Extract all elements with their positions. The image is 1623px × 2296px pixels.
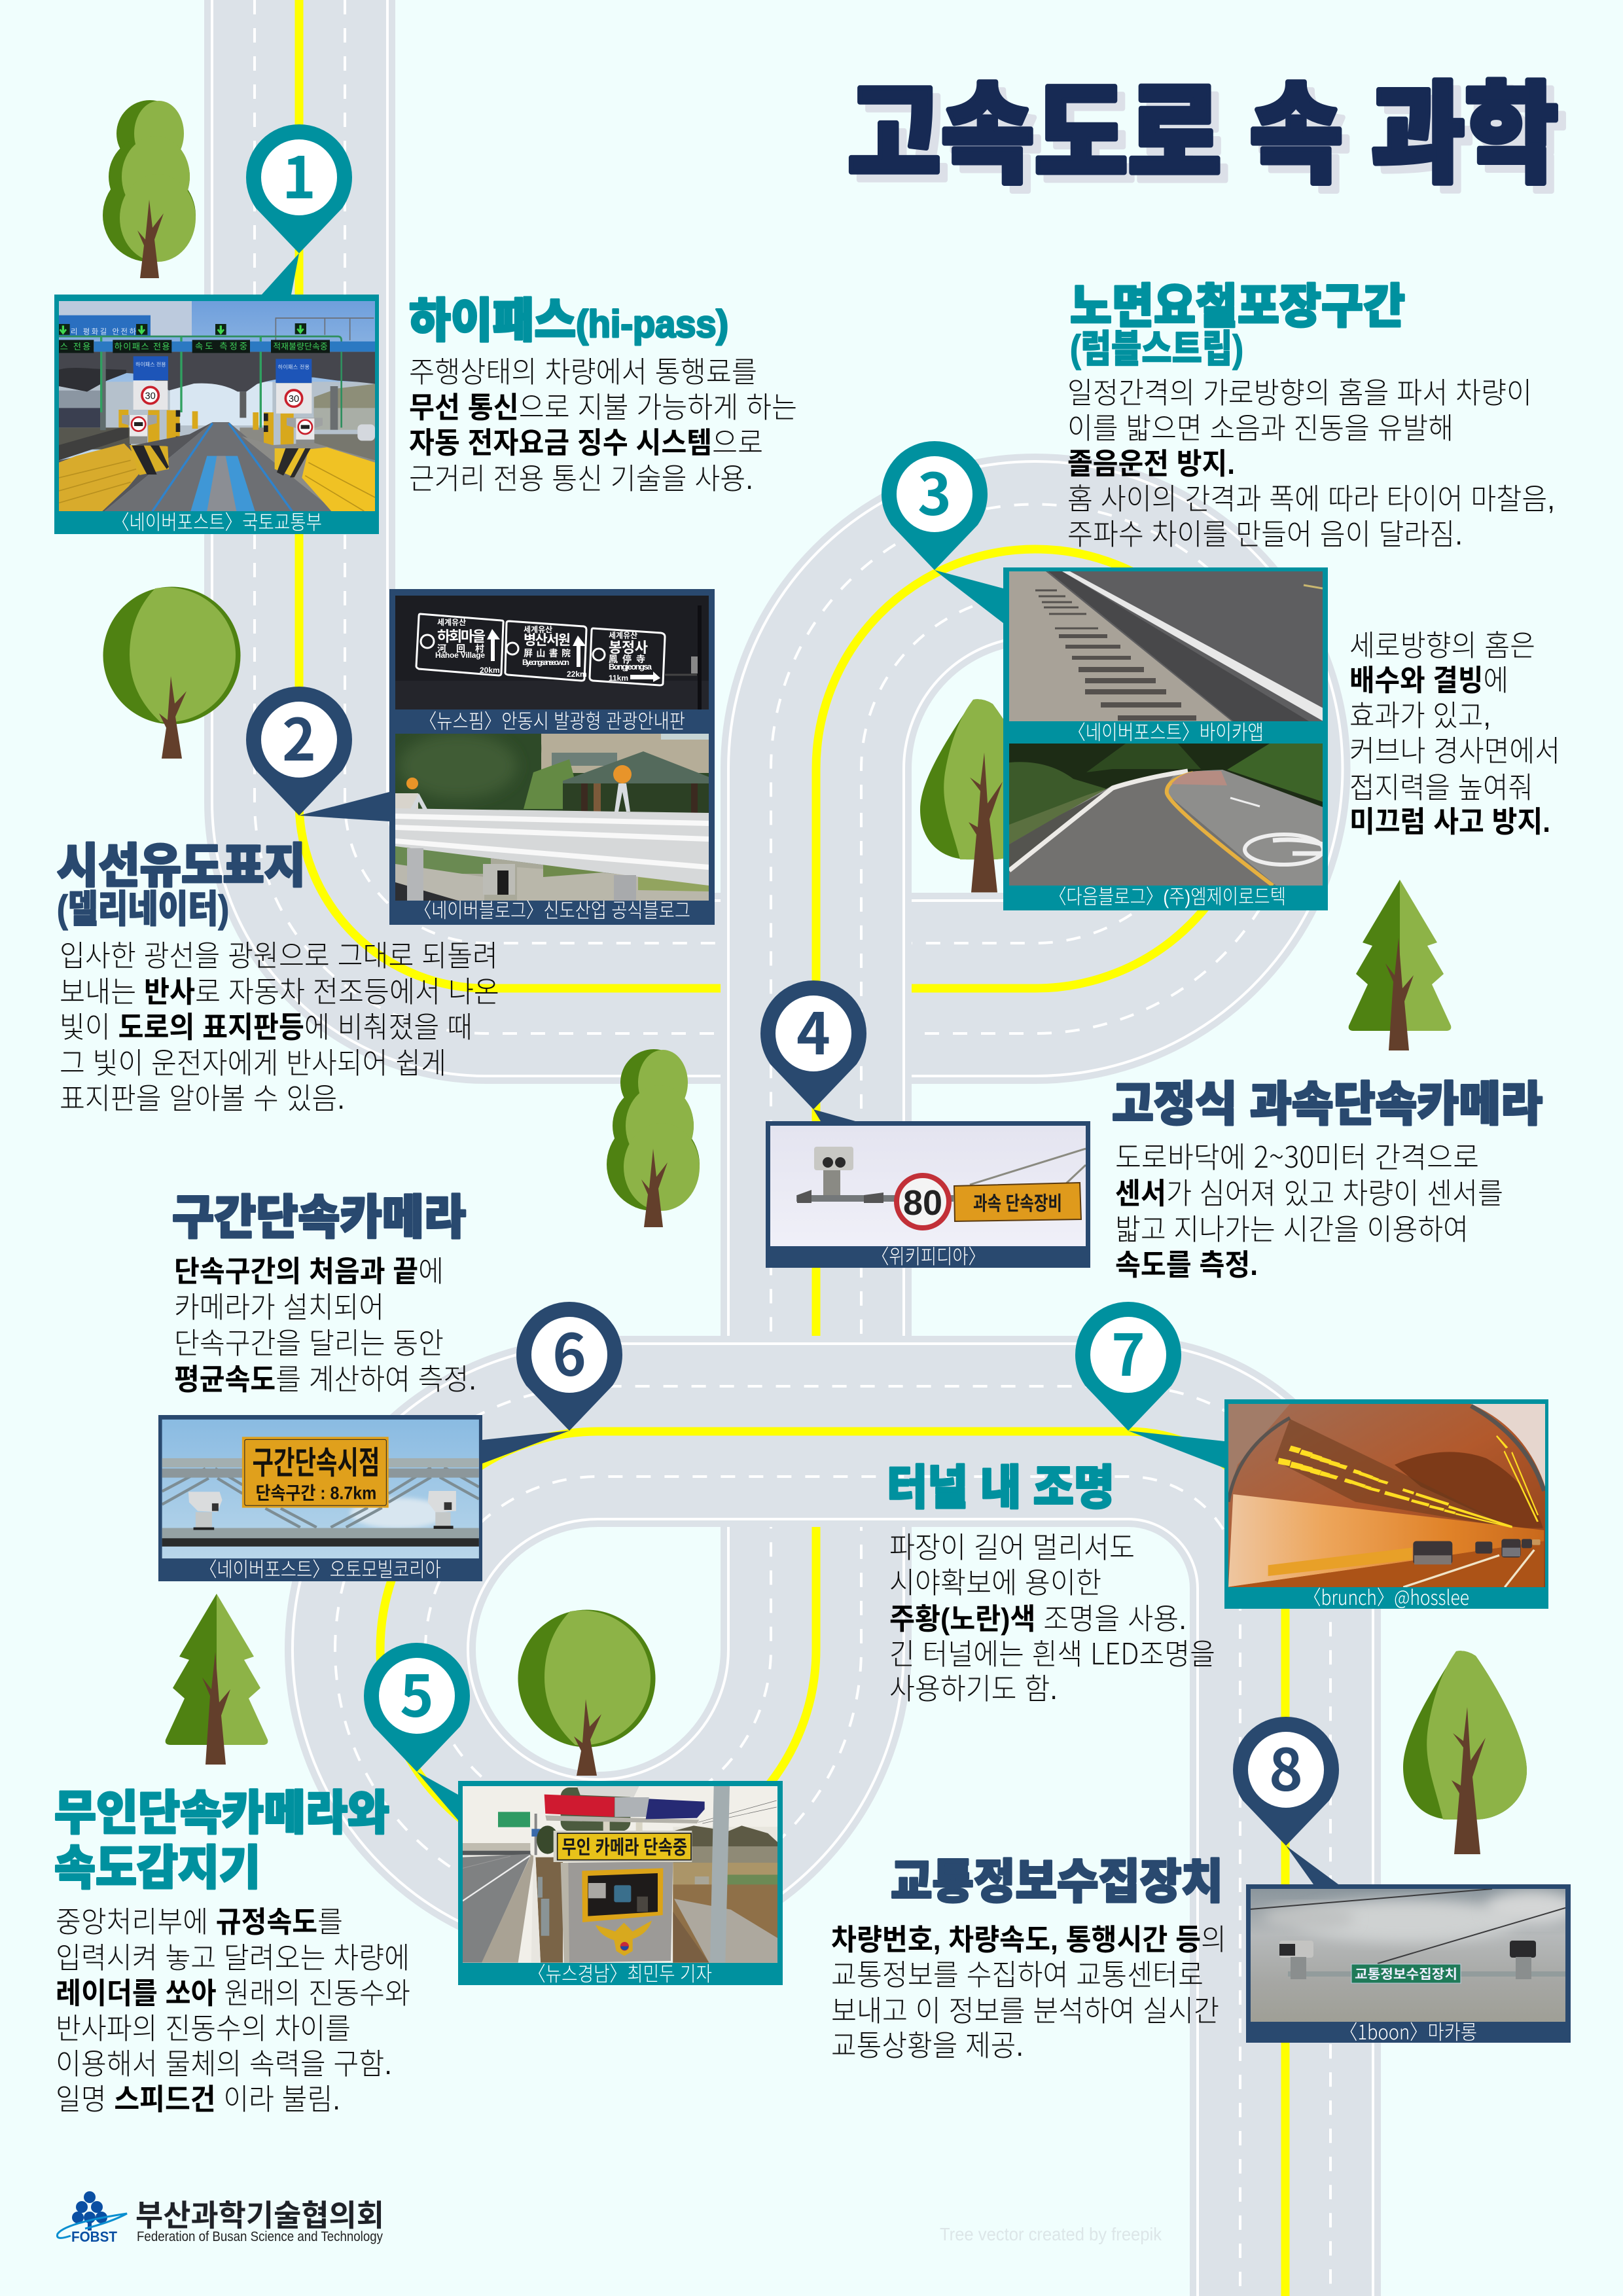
- body text: rumble strip: 일정간격의 가로방향의 홈을 파서 차량이: [1067, 376, 1532, 410]
- photo card 5: unmanned camera: [458, 1781, 783, 1986]
- road segment: upper loop, central vertical road and lower loop: [335, 504, 1300, 1912]
- panel 2: delineator text: [57, 840, 499, 1115]
- pin 2: [246, 687, 352, 816]
- panel 6: section camera text: [172, 1192, 476, 1396]
- pin 1: 1: [282, 132, 316, 215]
- pin 7: 7: [1111, 1310, 1145, 1393]
- body text: longitudinal grooves: [1349, 629, 1560, 838]
- body text: tunnel lighting: 긴 터널에는 흰색 LED조명을: [889, 1630, 1215, 1673]
- body text: speed camera: 일명 스피드건 이라 불림.: [56, 2083, 340, 2116]
- body text: fixed camera: [1115, 1134, 1503, 1282]
- panel 4: fixed camera text: [1112, 1079, 1543, 1282]
- photo card 1: hi-pass toll gate: [54, 295, 379, 534]
- panel 5: speed camera text: [54, 1787, 410, 2116]
- title: 고속도로 속 과학: [847, 73, 1558, 196]
- body text: delineator: 표지판을 알아볼 수 있음.: [60, 1082, 345, 1115]
- photo: toll gate: 적재불량단속중: [273, 342, 328, 351]
- pin 5: [364, 1643, 470, 1772]
- pin 1: [246, 124, 352, 253]
- photo: reflective road signs at night: 11km: [609, 673, 628, 683]
- body text: speed camera: 중앙처리부에 규정속도를: [56, 1905, 343, 1939]
- pin 5: 5: [400, 1651, 434, 1734]
- tree: stacked, top left: [103, 100, 196, 278]
- body text: traffic information collector: 교통상황을 제공.: [831, 2029, 1024, 2062]
- photo: reflective road signs at night: 22km: [567, 670, 587, 679]
- logo mark: [57, 2191, 127, 2245]
- photo: toll gate: 30: [289, 394, 299, 404]
- caption: 〈1boon〉마카롱: [1340, 2016, 1477, 2045]
- pin 8: 8: [1269, 1725, 1303, 1808]
- body text: rumble strip: [1067, 376, 1555, 551]
- photo: speed camera and 80 sign: [770, 1126, 1086, 1246]
- photo: speed camera and 80 sign: 80: [903, 1183, 942, 1223]
- pin 7: [1075, 1302, 1181, 1431]
- photo: camera box at road side: 무인 카메라 단속중: [562, 1837, 687, 1859]
- body text: traffic information collector: 교통정보를 수집하여 교통센터로: [831, 1958, 1204, 1992]
- body text: section camera: 단속구간의 처음과 끝에: [174, 1255, 444, 1288]
- photo card 7: tunnel: [1224, 1399, 1548, 1611]
- panel 7: tunnel text: [887, 1462, 1215, 1706]
- body text: hi-pass: 무선 통신으로 지불 가능하게 하는: [409, 391, 797, 424]
- body text: longitudinal grooves: 커브나 경사면에서: [1349, 734, 1560, 768]
- body text: section camera: 카메라가 설치되어: [174, 1291, 384, 1324]
- body text: speed camera: 이용해서 물체의 속력을 구함.: [56, 2047, 392, 2081]
- body text: tunnel lighting: 시야확보에 용이한: [889, 1566, 1101, 1600]
- photo: traffic information gantry: 교통정보수집장치: [1355, 1967, 1457, 1982]
- photo: section camera gantry: 구간단속시점: [252, 1445, 380, 1480]
- tree: pine, right: [1349, 880, 1451, 1050]
- body text: speed camera: 입력시켜 놓고 달려오는 차량에: [56, 1941, 410, 1975]
- pin 6: 6: [552, 1310, 586, 1393]
- pin 3: 3: [918, 449, 952, 532]
- heading: section camera: 구간단속카메라: [172, 1192, 466, 1244]
- photo: toll gate: 스 전용: [60, 342, 90, 351]
- body text: speed camera: 레이더를 쏘아 원래의 진동수와: [56, 1977, 410, 2010]
- body text: hi-pass: [409, 355, 797, 495]
- pin 4: [760, 980, 866, 1109]
- photo: delineators on guardrail: [395, 734, 709, 901]
- caption: 〈네이버블로그〉신도산업 공식블로그: [414, 899, 690, 922]
- body text: traffic information collector: 보내고 이 정보를 분석하여 실시간: [831, 1994, 1219, 2028]
- body text: rumble strip: 주파수 차이를 만들어 음이 달라짐.: [1067, 518, 1463, 551]
- credit: Tree vector created by freepik: [940, 2224, 1162, 2244]
- tree: teardrop, lower right: [1403, 1651, 1527, 1854]
- photo: toll gate: 하이패스 전용: [135, 361, 166, 367]
- photo: toll gate: 30: [145, 391, 156, 401]
- photo: reflective road signs at night: Hahoe Village: [435, 651, 485, 660]
- photo: toll gate: 속도 측정중: [195, 341, 247, 351]
- body text: section camera: [174, 1255, 476, 1396]
- photo: reflective road signs at night: 20km: [480, 666, 500, 675]
- heading: speed camera: [54, 1787, 389, 1895]
- road segment: lower horizontal road turning down to the bottom: [335, 1386, 1330, 2296]
- photo: toll gate: 리 평화길 안전하: [71, 327, 137, 336]
- body text: fixed camera: 도로바닥에 2~30미터 간격으로: [1115, 1134, 1479, 1176]
- photo card 3: rumble strip: [1003, 567, 1328, 910]
- logo English name: Federation of Busan Science and Technology: [137, 2229, 383, 2244]
- pin 3: [882, 441, 988, 570]
- tree: round, inside lower loop: [518, 1610, 656, 1776]
- body text: hi-pass: 주행상태의 차량에서 통행료를: [409, 355, 757, 389]
- body text: hi-pass: 근거리 전용 통신 기술을 사용.: [409, 462, 753, 495]
- photo card 2: delineator: [389, 589, 715, 925]
- body text: fixed camera: 속도를 측정.: [1115, 1248, 1258, 1282]
- heading: delineator: [57, 840, 306, 931]
- road network: [255, 0, 1330, 2296]
- pin 2: 2: [282, 694, 316, 778]
- pin 4: 4: [796, 988, 830, 1071]
- photo: reflective road signs at night: 병산서원: [524, 633, 571, 648]
- logo: Federation of Busan Science and Technology: [57, 2191, 384, 2245]
- body text: longitudinal grooves: 세로방향의 홈은: [1349, 629, 1535, 662]
- photo: reflective road signs at night: 세계유산: [524, 625, 552, 634]
- heading: rumble strip: [1070, 281, 1405, 370]
- body text: speed camera: 반사파의 진동수의 차이를: [56, 2012, 351, 2045]
- photo: reflective road signs at night: 봉 정 사: [609, 639, 648, 656]
- photo: rumble strip close up: [1009, 571, 1323, 721]
- body text: delineator: 입사한 광선을 광원으로 그대로 되돌려: [60, 939, 498, 973]
- body text: delineator: 그 빛이 운전자에게 반사되어 쉽게: [60, 1047, 446, 1080]
- body text: traffic information collector: [831, 1923, 1226, 2062]
- caption: 〈뉴스경남〉최민두 기자: [528, 1963, 712, 1986]
- heading: delineator: 시선유도표지: [57, 840, 306, 893]
- logo mark: FOBST: [71, 2229, 118, 2245]
- body text: tunnel lighting: 사용하기도 함.: [889, 1672, 1058, 1706]
- caption: 〈네이버포스트〉바이카앱: [1068, 721, 1264, 744]
- body text: longitudinal grooves: 효과가 있고,: [1349, 699, 1491, 732]
- photo card 6: section camera: [158, 1415, 482, 1581]
- body text: fixed camera: 밟고 지나가는 시간을 이용하여: [1115, 1213, 1469, 1246]
- tree: stacked, centre: [607, 1049, 700, 1227]
- body text: traffic information collector: 차량번호, 차량속도, 통행시간 등의: [831, 1923, 1226, 1956]
- tree: round, left: [103, 586, 241, 759]
- caption: 〈네이버포스트〉오토모빌코리아: [200, 1558, 441, 1581]
- body text: longitudinal grooves: 배수와 결빙에: [1349, 664, 1508, 697]
- body text: rumble strip: 졸음운전 방지.: [1067, 447, 1235, 480]
- heading: fixed camera: 고정식 과속단속카메라: [1112, 1079, 1543, 1131]
- photo: tunnel lighting: [1228, 1404, 1545, 1587]
- body text: delineator: [60, 939, 499, 1115]
- heading: delineator: (델리네이터): [57, 888, 229, 931]
- body text: delineator: 보내는 반사로 자동차 전조등에서 나온: [60, 975, 499, 1009]
- body text: longitudinal grooves: 미끄럼 사고 방지.: [1349, 805, 1550, 838]
- photo: camera box at road side: [463, 1786, 777, 1963]
- photo: toll gate: 하이패스 전용: [278, 363, 310, 370]
- title: 고속도로 속 과학: [855, 81, 1566, 204]
- heading: hi-pass: 하이패스(hi-pass): [409, 295, 728, 348]
- photo: reflective road signs at night: Bongjeongsa: [609, 662, 652, 672]
- heading: traffic information collector: 교통정보수집장치: [891, 1856, 1223, 1909]
- caption: 〈위키피디아〉: [872, 1246, 986, 1268]
- heading: rumble strip: 노면요철포장구간: [1070, 281, 1405, 333]
- heading: speed camera: 속도감지기: [54, 1842, 260, 1895]
- caption: 〈뉴스핌〉안동시 발광형 관광안내판: [419, 710, 685, 733]
- body text: section camera: 단속구간을 달리는 동안: [174, 1327, 444, 1360]
- photo card 8: traffic information camera: [1246, 1884, 1577, 2045]
- photo: toll gate: 하이패스 전용: [115, 342, 170, 351]
- body text: delineator: 빛이 도로의 표지판등에 비춰졌을 때: [60, 1011, 473, 1044]
- caption: 〈네이버포스트〉국토교통부: [112, 511, 322, 534]
- body text: hi-pass: 자동 전자요금 징수 시스템으로: [409, 426, 763, 459]
- tree: teardrop, inside upper loop: [920, 699, 1044, 892]
- photo: traffic information gantry: [1251, 1889, 1565, 2022]
- body text: tunnel lighting: 파장이 길어 멀리서도: [889, 1531, 1135, 1564]
- heading: tunnel lighting: 터널 내 조명: [887, 1462, 1115, 1515]
- body text: fixed camera: 센서가 심어져 있고 차량이 센서를: [1115, 1177, 1503, 1210]
- photo: section camera gantry: 단속구간 : 8.7km: [255, 1482, 376, 1503]
- photo: section camera gantry: [162, 1419, 479, 1559]
- pin 8: [1233, 1717, 1339, 1846]
- body text: tunnel lighting: [889, 1531, 1215, 1706]
- pin 6: [516, 1302, 622, 1431]
- photo: grooved road curve: [1009, 744, 1323, 886]
- caption: 〈다음블로그〉(주)엠제이로드텍: [1049, 886, 1286, 908]
- logo name: 부산과학기술협의회: [135, 2198, 384, 2233]
- photo: reflective road signs at night: 河 回 村: [437, 643, 484, 654]
- photo: reflective road signs at night: 세계유산: [609, 631, 637, 640]
- road segment: top road curving into the upper loop: [255, 0, 1300, 1033]
- panel 8: traffic information text: [831, 1856, 1226, 2062]
- body text: rumble strip: 홈 사이의 간격과 폭에 따라 타이어 마찰음,: [1067, 482, 1555, 516]
- photo: reflective road signs at night: 세계유산: [437, 618, 466, 627]
- body text: tunnel lighting: 주황(노란)색 조명을 사용.: [889, 1602, 1186, 1636]
- photo: speed camera and 80 sign: 과속 단속장비: [973, 1193, 1062, 1215]
- photo: reflective road signs at night: 하회마을: [437, 628, 486, 645]
- photo: reflective road signs at night: 鳳 停 寺: [609, 654, 645, 664]
- body text: section camera: 평균속도를 계산하여 측정.: [174, 1363, 476, 1396]
- photo: reflective road signs at night: Byeongsanseowon: [522, 658, 569, 667]
- panel 3: rumble strip text: [1067, 281, 1560, 838]
- panel 1: hi-pass: [409, 295, 797, 495]
- photo card 4: fixed speed camera: [766, 1121, 1090, 1268]
- caption: 〈brunch〉@hosslee: [1304, 1581, 1469, 1611]
- photo: reflective road signs at night: [395, 596, 709, 709]
- photo: toll gate: [59, 301, 375, 511]
- callout tails: [262, 253, 1338, 1884]
- heading: speed camera: 무인단속카메라와: [54, 1787, 389, 1840]
- body text: speed camera: [56, 1905, 410, 2116]
- heading: rumble strip: (럼블스트립): [1070, 328, 1243, 370]
- tree: pine, lower left: [166, 1594, 268, 1765]
- body text: rumble strip: 이를 밟으면 소음과 진동을 유발해: [1067, 412, 1454, 445]
- body text: longitudinal grooves: 접지력을 높여줘: [1349, 771, 1533, 804]
- photo: reflective road signs at night: 屛 山 書 院: [524, 648, 571, 658]
